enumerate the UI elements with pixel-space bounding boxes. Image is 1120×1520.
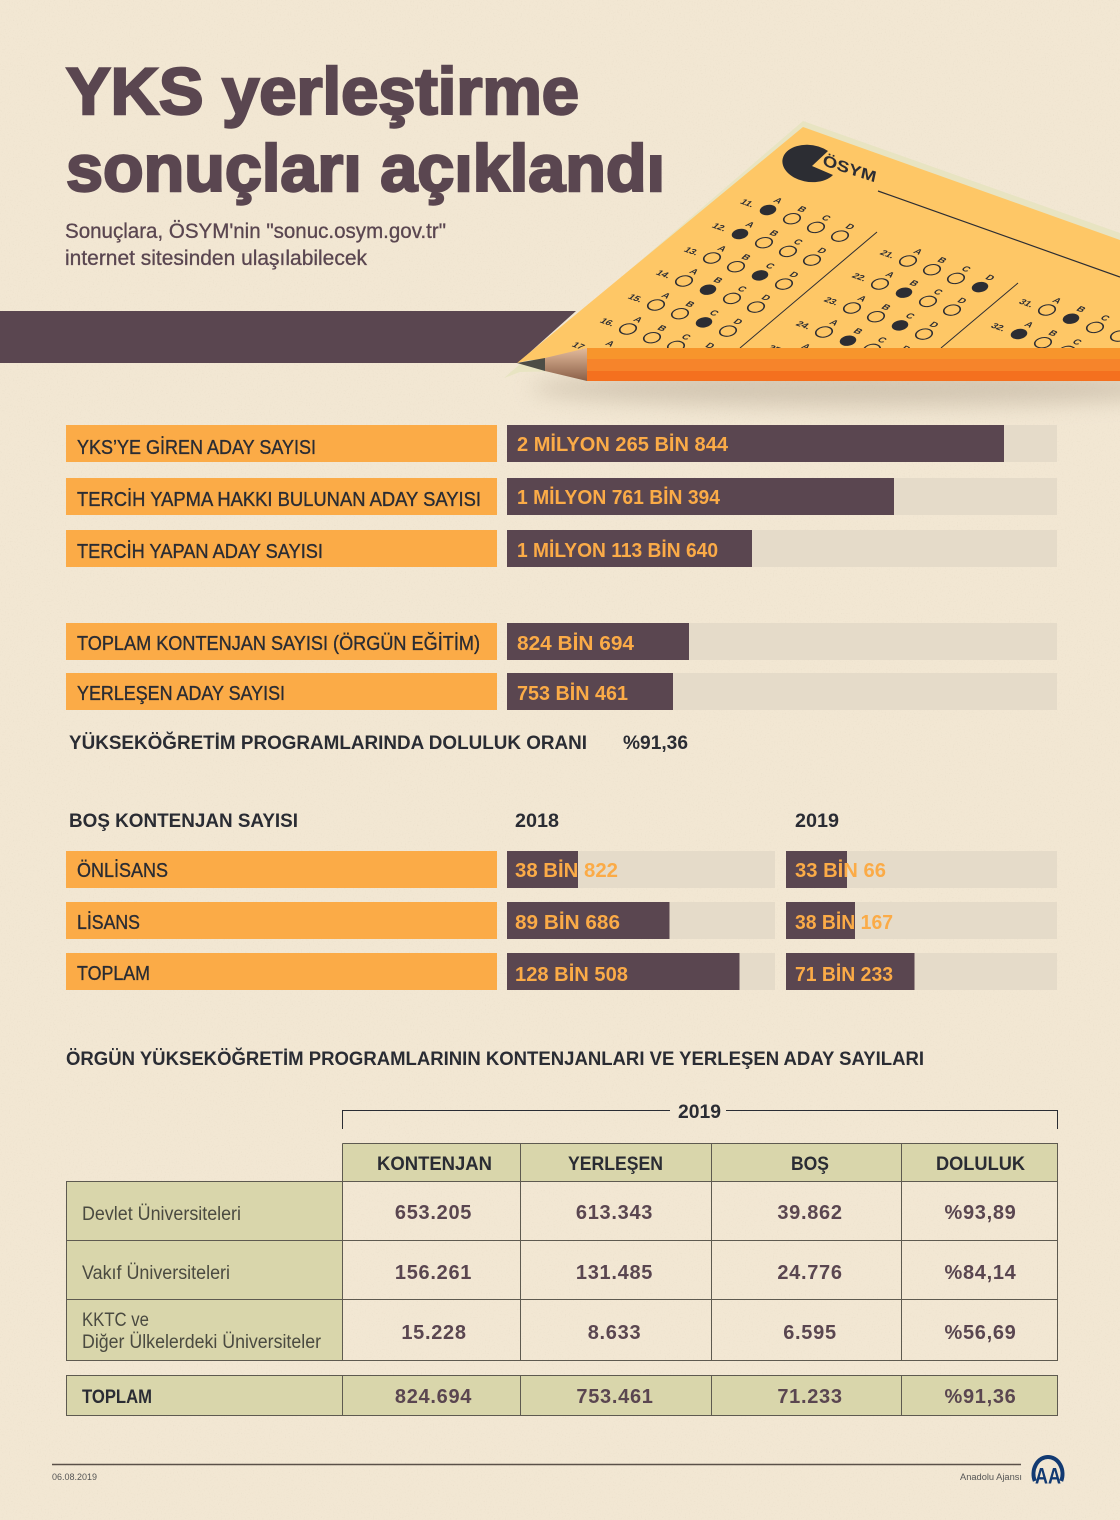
answer bubbles: column 2: B xyxy=(879,302,894,312)
answer bubbles: column 1: C xyxy=(735,284,750,294)
table row: foundation universities: 24.776 xyxy=(777,1262,843,1284)
answer bubbles: column 1: B xyxy=(739,252,754,262)
table header row: KONTENJAN xyxy=(377,1154,492,1175)
pencil xyxy=(517,348,1120,381)
answer bubbles: column 3: C xyxy=(1098,313,1113,323)
answer bubbles: column 1: B xyxy=(795,204,810,214)
answer bubbles: column 2: A xyxy=(883,269,898,279)
table row: total: 753.461 xyxy=(576,1386,654,1408)
row: bachelor xyxy=(66,902,1057,939)
table row: KKTC and other countries: KKTC ve xyxy=(82,1310,149,1331)
credit: Anadolu Ajansı xyxy=(960,1472,1022,1482)
row: bachelor: 89 BİN 686 xyxy=(515,911,620,934)
answer bubbles: column 3: C xyxy=(1070,337,1085,347)
vacant quota headings xyxy=(69,811,839,832)
answer bubbles: column 3: B xyxy=(1046,328,1061,338)
footer xyxy=(52,1457,1062,1488)
illustration: answer sheet and pencil xyxy=(504,121,1120,406)
row: total: TOPLAM xyxy=(77,963,150,985)
row: candidates who chose: TERCİH YAPAN ADAY SAYISI xyxy=(77,540,323,563)
answer bubbles: column 2: A xyxy=(855,293,870,303)
answer bubbles: column 2: 21. xyxy=(878,248,898,260)
subtitle: Sonuçlara, ÖSYM'nin "sonuc.osym.gov.tr" xyxy=(65,220,446,243)
answer bubbles: column 1: 16. xyxy=(598,316,618,328)
answer bubbles: column 1: A xyxy=(659,290,674,300)
date: 06.08.2019 xyxy=(52,1472,97,1482)
table row: KKTC and other countries: Diğer Ülkelerdeki Üniversiteler xyxy=(82,1332,322,1353)
answer bubbles: column 1: C xyxy=(791,237,806,247)
vacant quota headings: 2018 xyxy=(515,811,559,832)
pencil shadow xyxy=(530,370,1120,406)
answer bubbles: column 2 xyxy=(766,238,1001,364)
answer bubbles: column 1: A xyxy=(743,219,758,229)
vacant quota headings: BOŞ KONTENJAN SAYISI xyxy=(69,811,298,832)
answer bubbles: column 1: C xyxy=(763,261,778,271)
answer bubbles: column 2: 23. xyxy=(822,295,842,307)
answer bubbles: column 1: D xyxy=(815,246,830,255)
row: candidates who chose xyxy=(66,530,1057,567)
year bracket xyxy=(342,1102,1058,1129)
row: YKS candidates: YKS’YE GİREN ADAY SAYISI xyxy=(77,436,316,459)
row: placed candidates: YERLEŞEN ADAY SAYISI xyxy=(77,683,285,705)
answer bubbles: column 2: D xyxy=(899,344,914,353)
answer bubbles: column 2: C xyxy=(959,264,974,274)
table row: KKTC and other countries: 8.633 xyxy=(588,1322,641,1344)
table row: state universities: 39.862 xyxy=(777,1202,843,1224)
table row: state universities: 613.343 xyxy=(576,1202,653,1224)
answer bubbles: column 1: A xyxy=(603,338,618,348)
subtitle: internet sitesinden ulaşılabilecek xyxy=(65,247,367,270)
panel: vacant quota xyxy=(66,811,1057,990)
row: total quota: 824 BİN 694 xyxy=(517,632,635,655)
answer bubbles: column 1 xyxy=(570,187,861,361)
answer bubbles: column 2: 25. xyxy=(766,343,786,355)
row: associate degree: ÖNLİSANS xyxy=(77,859,168,882)
answer bubbles: column 2: C xyxy=(903,311,918,321)
row: total quota xyxy=(66,623,1057,660)
table header row: BOŞ xyxy=(791,1154,829,1175)
header band xyxy=(0,311,576,363)
answer bubbles: column 1: D xyxy=(703,341,718,350)
answer bubbles: column 3: 32. xyxy=(989,321,1009,333)
row: associate degree: 38 BİN 822 xyxy=(515,859,618,882)
occupancy rate: %91,36 xyxy=(623,733,688,754)
row: total: 128 BİN 508 xyxy=(515,963,628,986)
answer bubbles: column 1: B xyxy=(683,299,698,309)
answer bubbles: column 2: C xyxy=(931,287,946,297)
table xyxy=(66,1143,1058,1416)
answer bubbles: column 3 xyxy=(988,287,1120,367)
answer bubbles: column 1: 15. xyxy=(626,292,646,304)
answer bubbles: column 1: B xyxy=(655,323,670,333)
answer bubbles: column 2: A xyxy=(799,341,814,351)
row: placed candidates: 753 BİN 461 xyxy=(517,682,628,705)
table fills xyxy=(66,1143,1057,1415)
row: associate degree: 33 BİN 66 xyxy=(795,859,886,882)
row: total quota: TOPLAM KONTENJAN SAYISI (ÖRGÜN EĞİTİM) xyxy=(77,632,480,655)
subtitle xyxy=(65,220,446,270)
table row: foundation universities: 156.261 xyxy=(395,1262,472,1284)
row: placed candidates xyxy=(66,673,1057,710)
answer bubbles: column 2: D xyxy=(955,296,970,305)
ÖSYM logo: ÖSYM xyxy=(821,151,878,186)
row: bachelor: LİSANS xyxy=(77,911,140,934)
title xyxy=(66,54,665,205)
title: sonuçları açıklandı xyxy=(66,131,665,205)
table row: foundation universities xyxy=(82,1262,1017,1284)
table row: total: 824.694 xyxy=(395,1386,472,1408)
table row: KKTC and other countries: 15.228 xyxy=(401,1322,467,1344)
table lines xyxy=(66,1144,1058,1416)
answer bubbles: column 1: B xyxy=(767,228,782,238)
answer bubbles: column 1: A xyxy=(631,314,646,324)
ÖSYM logo xyxy=(782,145,878,186)
row: YKS candidates: 2 MİLYON 265 BİN 844 xyxy=(517,433,729,456)
table row: KKTC and other countries xyxy=(82,1310,1017,1353)
occupancy rate: YÜKSEKÖĞRETİM PROGRAMLARINDA DOLULUK ORANI xyxy=(69,732,587,754)
table header row xyxy=(377,1154,1025,1175)
table row: state universities: Devlet Üniversiteleri xyxy=(82,1204,241,1225)
answer bubbles: column 1: C xyxy=(707,308,722,318)
answer bubbles: column 2: D xyxy=(983,273,998,282)
answer bubbles: column 2: A xyxy=(827,317,842,327)
panel: quota and placement xyxy=(66,623,1057,754)
table row: state universities xyxy=(82,1202,1017,1225)
answer bubbles: column 2: B xyxy=(851,326,866,336)
table row: foundation universities: %84,14 xyxy=(944,1262,1017,1284)
answer bubbles: column 1: A xyxy=(771,195,786,205)
answer bubbles: column 1: D xyxy=(843,222,858,231)
row: eligible candidates: 1 MİLYON 761 BİN 394 xyxy=(517,486,721,509)
table row: total xyxy=(82,1386,1017,1408)
answer bubbles: column 2: B xyxy=(935,255,950,265)
row: eligible candidates xyxy=(66,478,1057,515)
row: YKS candidates xyxy=(66,425,1057,462)
answer bubbles: column 1: 17. xyxy=(570,340,590,352)
table row: foundation universities: Vakıf Üniversiteleri xyxy=(82,1263,230,1284)
answer bubbles: column 2: 22. xyxy=(850,271,870,283)
answer bubbles: column 1: 12. xyxy=(710,221,730,233)
icon: AA logo: AA xyxy=(1035,1464,1061,1488)
answer bubbles: column 1: A xyxy=(687,266,702,276)
answer sheet xyxy=(504,121,1120,378)
table row: total: %91,36 xyxy=(944,1386,1017,1408)
answer bubbles: column 3: A xyxy=(1050,295,1065,305)
row: total: 71 BİN 233 xyxy=(795,963,893,986)
answer bubbles: column 1: D xyxy=(787,270,802,279)
year bracket: 2019 xyxy=(678,1102,721,1123)
table header row: YERLEŞEN xyxy=(568,1154,663,1175)
row: bachelor: 38 BİN 167 xyxy=(795,911,893,934)
answer bubbles: column 2: 24. xyxy=(794,319,814,331)
answer bubbles: column 2: C xyxy=(875,335,890,345)
answer bubbles: column 1: D xyxy=(759,293,774,302)
table row: foundation universities: 131.485 xyxy=(576,1262,653,1284)
answer bubbles: column 1: C xyxy=(679,332,694,342)
answer bubbles: column 1: A xyxy=(715,243,730,253)
answer bubbles: column 1: B xyxy=(711,275,726,285)
answer bubbles: column 1: C xyxy=(819,213,834,223)
table row: total: 71.233 xyxy=(777,1386,843,1408)
icon: AA logo xyxy=(1034,1457,1062,1488)
table heading: ÖRGÜN YÜKSEKÖĞRETİM PROGRAMLARININ KONTENJANLARI VE YERLEŞEN ADAY SAYILARI xyxy=(66,1048,924,1070)
panel: candidate counts xyxy=(66,425,1057,567)
table row: KKTC and other countries: %56,69 xyxy=(944,1322,1017,1344)
row: associate degree xyxy=(66,851,1057,888)
answer bubbles: column 2: B xyxy=(907,278,922,288)
answer bubbles: column 1: D xyxy=(731,317,746,326)
row: eligible candidates: TERCİH YAPMA HAKKI BULUNAN ADAY SAYISI xyxy=(77,488,481,511)
answer bubbles: column 2: D xyxy=(927,320,942,329)
table header row: DOLULUK xyxy=(936,1154,1025,1175)
table row: state universities: %93,89 xyxy=(944,1202,1017,1224)
answer bubbles: column 3: 31. xyxy=(1017,297,1037,309)
table row: total: TOPLAM xyxy=(82,1387,152,1408)
answer bubbles: column 1: 11. xyxy=(738,197,758,209)
title: YKS yerleştirme xyxy=(66,54,579,128)
answer bubbles: column 1: 13. xyxy=(682,245,702,257)
answer bubbles: column 3: A xyxy=(1022,319,1037,329)
answer bubbles: column 2: A xyxy=(911,246,926,256)
vacant quota headings: 2019 xyxy=(795,811,839,832)
answer bubbles: column 3: B xyxy=(1074,304,1089,314)
row: candidates who chose: 1 MİLYON 113 BİN 640 xyxy=(517,539,718,562)
answer bubbles: column 1: 14. xyxy=(654,268,674,280)
table row: state universities: 653.205 xyxy=(395,1202,472,1224)
table row: KKTC and other countries: 6.595 xyxy=(783,1322,837,1344)
row: total xyxy=(66,953,1057,990)
